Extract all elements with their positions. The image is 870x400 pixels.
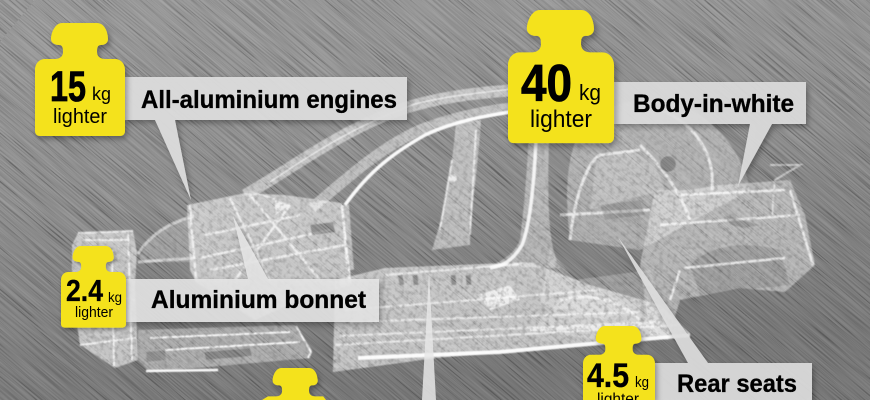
weight badge: 2.4 kg: kg <box>108 289 122 305</box>
callout: all-aluminium engines: All-aluminium engines <box>141 86 397 114</box>
car body x-ray <box>72 90 815 372</box>
front floor plate <box>138 325 312 372</box>
callout: body-in-white: Body-in-white <box>633 90 794 118</box>
weight badge: 40 kg: lighter <box>530 106 592 133</box>
weight badge: 15 kg: lighter <box>53 106 107 128</box>
weight badge: 40 kg: 40 <box>521 55 572 113</box>
C pillar panel <box>490 105 560 268</box>
weight badge: 2.4 kg: lighter <box>75 304 113 321</box>
callout: rear seats <box>618 237 812 400</box>
rear wheel arch floor <box>530 290 660 340</box>
callout: rear seats: Rear seats <box>677 370 797 398</box>
rear quarter and wheel arch <box>640 165 815 340</box>
engine bay and firewall <box>187 193 352 320</box>
callout: all-aluminium engines <box>125 77 407 200</box>
bright structural highlights <box>146 88 690 371</box>
outer roof rail <box>245 90 520 215</box>
rear door frame <box>560 100 750 250</box>
front wheel arch rail <box>138 216 195 262</box>
callout: aluminium bonnet: Aluminium bonnet <box>151 286 367 314</box>
front crash module <box>72 231 138 368</box>
weight badge: 2.4 kg: 2.4 <box>66 273 104 308</box>
weight badge: 15 kg: kg <box>92 84 111 104</box>
floor pan <box>333 250 690 372</box>
weight badge: 4.5 kg: 4.5 <box>587 357 629 395</box>
A pillar band <box>312 108 510 270</box>
weight badge: 4.5 kg <box>583 326 655 400</box>
callout: aluminium bonnet <box>126 216 379 322</box>
weight badge: 4.5 kg: kg <box>635 374 649 391</box>
weight badge: 40 kg: kg <box>579 80 601 105</box>
weight badge: 40 kg <box>508 10 614 143</box>
weight badge: 15 kg: 15 <box>50 63 86 111</box>
callout pointer: bottom label <box>422 273 436 400</box>
weight badge: bottom, cropped <box>262 368 326 400</box>
weight badge: 15 kg <box>35 23 125 136</box>
weight badge: 2.4 kg <box>61 246 126 328</box>
callout: body-in-white <box>614 82 806 186</box>
B pillar <box>432 120 481 250</box>
